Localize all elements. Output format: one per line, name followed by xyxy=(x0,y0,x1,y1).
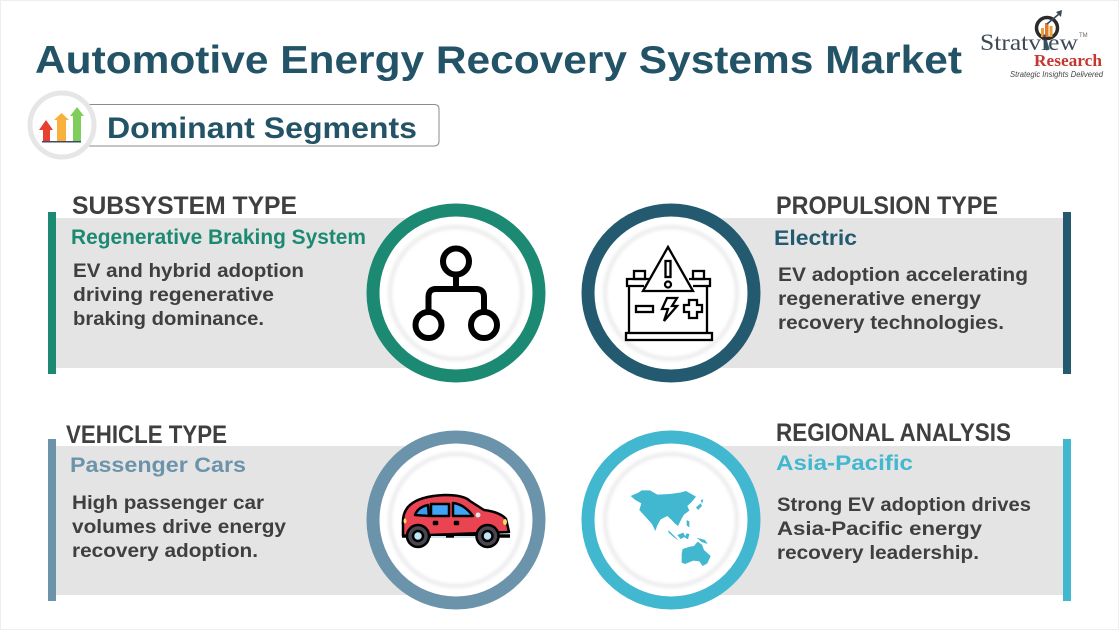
subheading: electric: Electric xyxy=(774,227,857,250)
text block: subsystem description: braking dominance. xyxy=(73,309,264,330)
text block: regional description: Asia-Pacific energy xyxy=(777,519,982,540)
text block: regional description: Strong EV adoption drives xyxy=(777,495,1031,516)
icon: Asia-Pacific map in cyan ring xyxy=(588,437,754,603)
text block: propulsion description: recovery technologies. xyxy=(778,313,1004,334)
subheading: asia-pacific: Asia-Pacific xyxy=(776,452,913,475)
text block: vehicle description: recovery adoption. xyxy=(72,541,258,562)
text block: subsystem description: driving regenerative xyxy=(73,285,274,306)
subheading: passenger cars: Passenger Cars xyxy=(70,454,246,477)
panel: regional analysis xyxy=(700,419,1071,601)
text block: propulsion description: EV adoption accelerating xyxy=(778,265,1028,286)
logo: Stratview Research: Stratview xyxy=(980,30,1078,55)
heading: vehicle type: VEHICLE TYPE xyxy=(66,421,227,449)
text block: regional description: recovery leadership. xyxy=(777,543,979,564)
text block: vehicle description: volumes drive energy xyxy=(72,517,286,538)
panel: vehicle type xyxy=(48,421,428,601)
icon: magnifier with bars xyxy=(1036,10,1062,50)
text block: regional description xyxy=(777,495,1031,564)
icon: red car in blue-grey ring xyxy=(373,437,539,603)
heading: propulsion type: PROPULSION TYPE xyxy=(776,192,998,220)
heading: subsystem type: SUBSYSTEM TYPE xyxy=(72,192,297,220)
text block: propulsion description xyxy=(778,265,1028,334)
section heading: Dominant Segments: Dominant Segments xyxy=(107,112,417,145)
icon: rising arrows xyxy=(30,93,94,157)
text block: propulsion description: regenerative energy xyxy=(778,289,981,310)
logo: Stratview Research: Research xyxy=(1034,51,1103,70)
text block: vehicle description: High passenger car xyxy=(72,493,265,514)
logo: Stratview Research xyxy=(980,10,1104,79)
icon: hierarchy in green ring xyxy=(373,210,539,376)
section heading: Dominant Segments xyxy=(30,93,439,157)
icon: battery warning in navy ring xyxy=(588,210,754,376)
panel: propulsion type xyxy=(700,192,1071,374)
heading: regional analysis: REGIONAL ANALYSIS xyxy=(776,419,1011,447)
text block: vehicle description xyxy=(72,493,286,562)
logo: Stratview Research: Strategic Insights Delivered xyxy=(1010,70,1104,79)
text block: subsystem description xyxy=(73,261,304,330)
subheading: regenerative braking system: Regenerative Braking System xyxy=(71,226,366,249)
title: Automotive Energy Recovery Systems Market xyxy=(35,39,962,82)
text block: subsystem description: EV and hybrid adoption xyxy=(73,261,304,282)
logo: Stratview Research: TM xyxy=(1079,33,1088,39)
panel: subsystem type xyxy=(48,192,428,374)
